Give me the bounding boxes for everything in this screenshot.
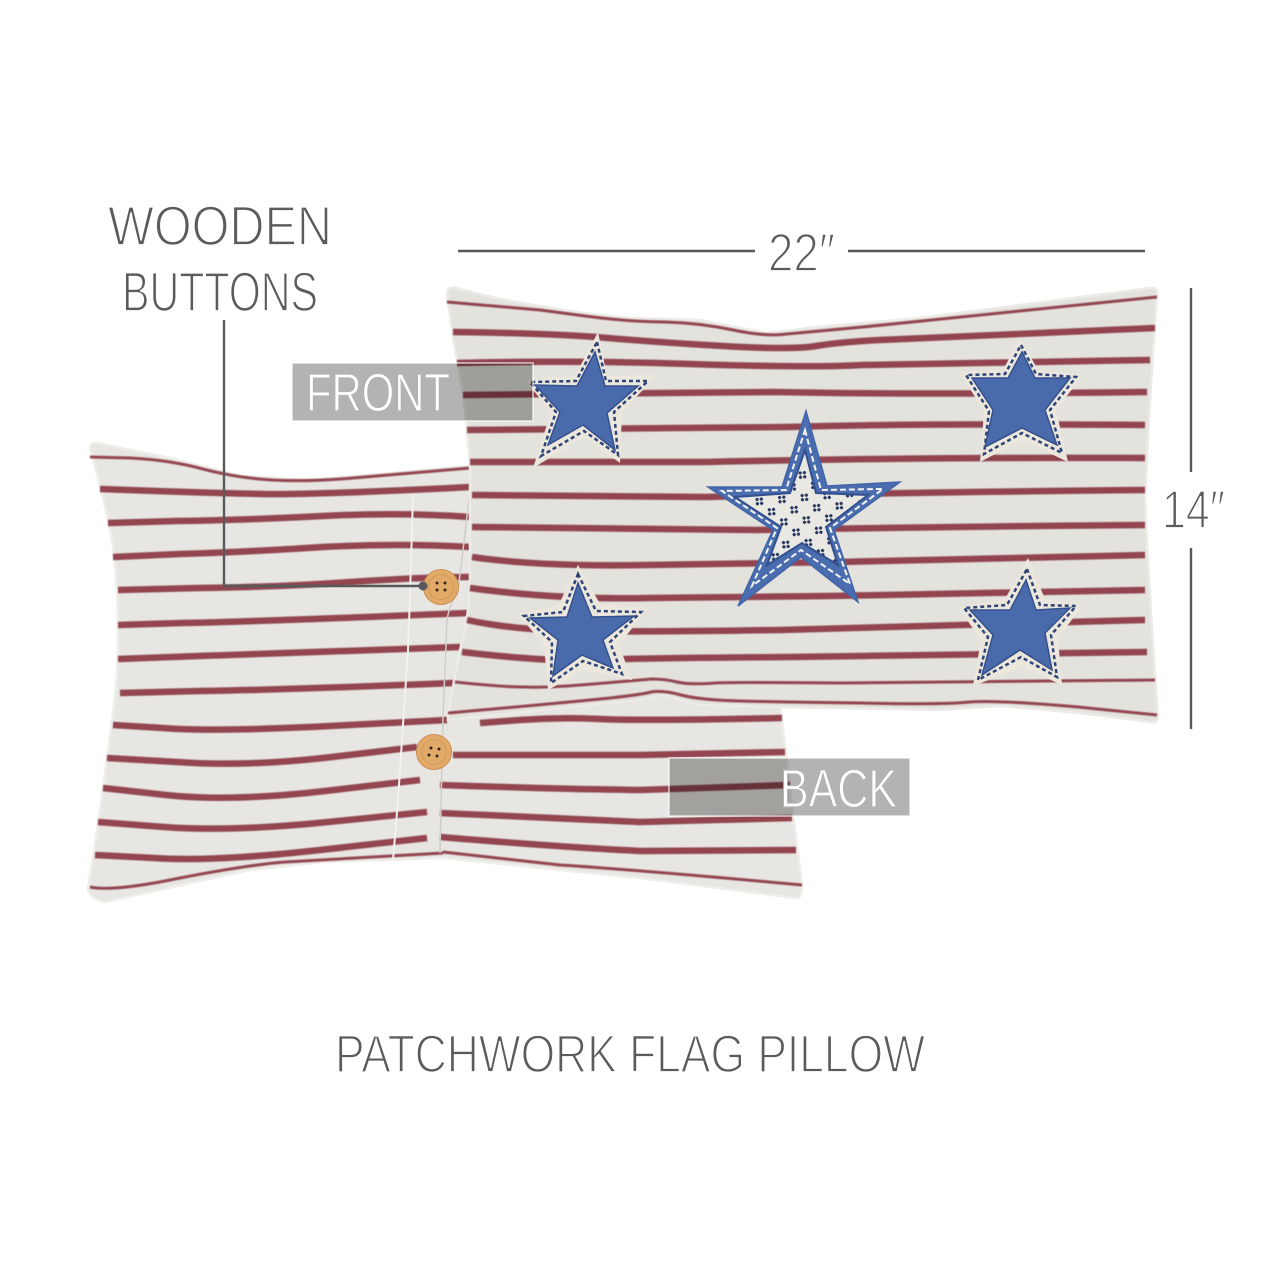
back pillow stripes	[90, 457, 802, 888]
title: product name: PATCHWORK FLAG PILLOW	[335, 1025, 925, 1084]
back pillow fabric	[88, 443, 802, 902]
dimension: width 22 inches: 22″	[768, 223, 835, 283]
star: top right	[960, 338, 1083, 462]
wooden button upper	[424, 570, 458, 604]
leader line: wooden buttons	[224, 320, 428, 590]
back placket seams	[393, 490, 470, 860]
label: back: BACK	[780, 759, 897, 819]
heading: wooden buttons	[108, 194, 332, 323]
heading: wooden buttons: BUTTONS	[122, 260, 318, 323]
front pillow fabric	[447, 288, 1158, 722]
star: centre patchwork	[708, 411, 900, 606]
label: back	[669, 758, 910, 819]
label: front: FRONT	[306, 363, 450, 423]
front pillow	[447, 288, 1158, 722]
star: bottom left	[518, 565, 648, 690]
front pillow stripes	[447, 297, 1157, 715]
heading: wooden buttons: WOODEN	[108, 194, 332, 257]
star: bottom right	[958, 558, 1083, 686]
dimension: height 14 inches: 14″	[1162, 480, 1225, 540]
wooden button lower	[416, 734, 452, 770]
star: top left	[525, 332, 657, 468]
back pillow	[88, 443, 802, 902]
